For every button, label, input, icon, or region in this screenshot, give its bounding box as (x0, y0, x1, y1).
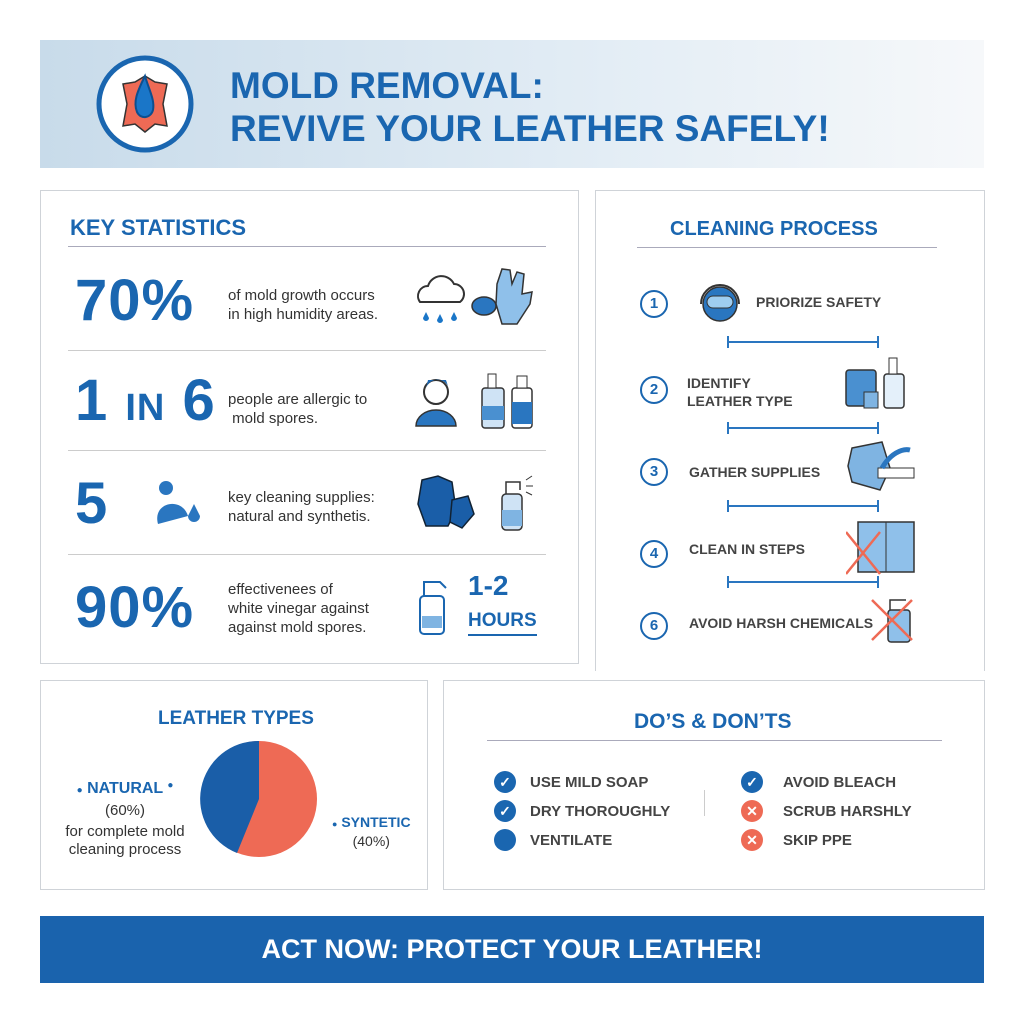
header banner (40, 40, 984, 168)
pie chart (200, 741, 317, 857)
step 1: PRIORIZE SAFETY (756, 294, 881, 310)
legend: natural: ● NATURAL ● (77, 780, 173, 797)
stat 90%: effectivenees of (228, 581, 333, 598)
step 6 (640, 599, 913, 643)
footer banner (40, 916, 984, 983)
stat 1 in 6: people are allergic to (228, 391, 367, 408)
step 3 (640, 441, 914, 491)
title: MOLD REMOVAL: (230, 65, 544, 106)
list: dos: ✓ (499, 774, 511, 790)
stat 70%: in high humidity areas. (228, 306, 378, 323)
title: REVIVE YOUR LEATHER SAFELY! (230, 108, 830, 149)
step 2 (640, 358, 905, 409)
heading: leather types: LEATHER TYPES (158, 708, 314, 729)
step 2: IDENTIFY (687, 375, 751, 391)
list: dos (494, 771, 670, 851)
heading: dos and donts: DO’S & DON’TS (634, 710, 792, 733)
stat 5: natural and synthetis. (228, 508, 371, 525)
list: donts: ✕ (746, 832, 758, 848)
list: donts: ✓ (746, 774, 758, 790)
title (230, 65, 830, 149)
list: dos: DRY THOROUGHLY (530, 803, 670, 820)
stat 5: key cleaning supplies: (228, 489, 375, 506)
stat 90% (75, 570, 537, 640)
icon: cloud and gloves (417, 268, 533, 325)
1-2 hours: 1-2 (468, 570, 508, 601)
stat 90%: white vinegar against (228, 600, 369, 617)
step 6: 6 (650, 617, 658, 634)
list: donts: ✕ (746, 803, 758, 819)
panel: cleaning process (595, 190, 985, 671)
icon: leather and spray (417, 475, 533, 531)
list: donts: SKIP PPE (783, 832, 852, 849)
stat 70%: 70% (75, 268, 194, 333)
list: dos: ✓ (499, 803, 511, 819)
legend: natural (65, 780, 185, 858)
legend: natural: for complete mold (65, 823, 185, 840)
stat 90%: against mold spores. (228, 619, 366, 636)
legend: syntetic (332, 814, 411, 849)
list: donts (741, 771, 912, 851)
stat 1 in 6: mold spores. (232, 410, 318, 427)
step 1 (640, 284, 881, 322)
step 2: 2 (650, 381, 658, 398)
step 1: 1 (650, 295, 658, 312)
list: dos: USE MILD SOAP (530, 774, 648, 791)
stat 90%: 90% (75, 575, 194, 640)
stat 70%: of mold growth occurs (228, 287, 375, 304)
legend: natural: cleaning process (69, 841, 181, 858)
panel: key statistics (40, 190, 579, 664)
step 3: GATHER SUPPLIES (689, 464, 820, 480)
stat 1 in 6 (75, 368, 533, 433)
list: donts: SCRUB HARSHLY (783, 803, 912, 820)
panel: leather types (40, 680, 428, 890)
heading: key statistics: KEY STATISTICS (70, 215, 246, 240)
icon: person and bottles (415, 374, 533, 429)
stat 5 (75, 471, 533, 536)
stat 90%: HOURS (468, 610, 537, 631)
icon: drops (157, 481, 200, 524)
step 4: 4 (650, 545, 658, 562)
list: dos: VENTILATE (530, 832, 612, 849)
icon: leather with drop (96, 56, 194, 152)
panel: dos and donts (443, 680, 985, 890)
step 6: AVOID HARSH CHEMICALS (689, 615, 873, 631)
heading: cleaning process: CLEANING PROCESS (670, 218, 878, 240)
legend: syntetic: ● SYNTETIC (332, 814, 411, 830)
step 3: 3 (650, 463, 658, 480)
legend: syntetic: (40%) (353, 833, 390, 849)
stat 1 in 6: 1 IN 6 (75, 368, 216, 433)
list: donts: AVOID BLEACH (783, 774, 896, 791)
stat 70% (75, 268, 533, 333)
footer banner: ACT NOW: PROTECT YOUR LEATHER! (262, 934, 762, 964)
stat 5: 5 (75, 471, 108, 536)
icon: spray bottle (419, 581, 447, 635)
step 2: LEATHER TYPE (687, 393, 793, 409)
step 4 (640, 521, 915, 575)
legend: natural: (60%) (105, 802, 145, 819)
step 4: CLEAN IN STEPS (689, 541, 805, 557)
